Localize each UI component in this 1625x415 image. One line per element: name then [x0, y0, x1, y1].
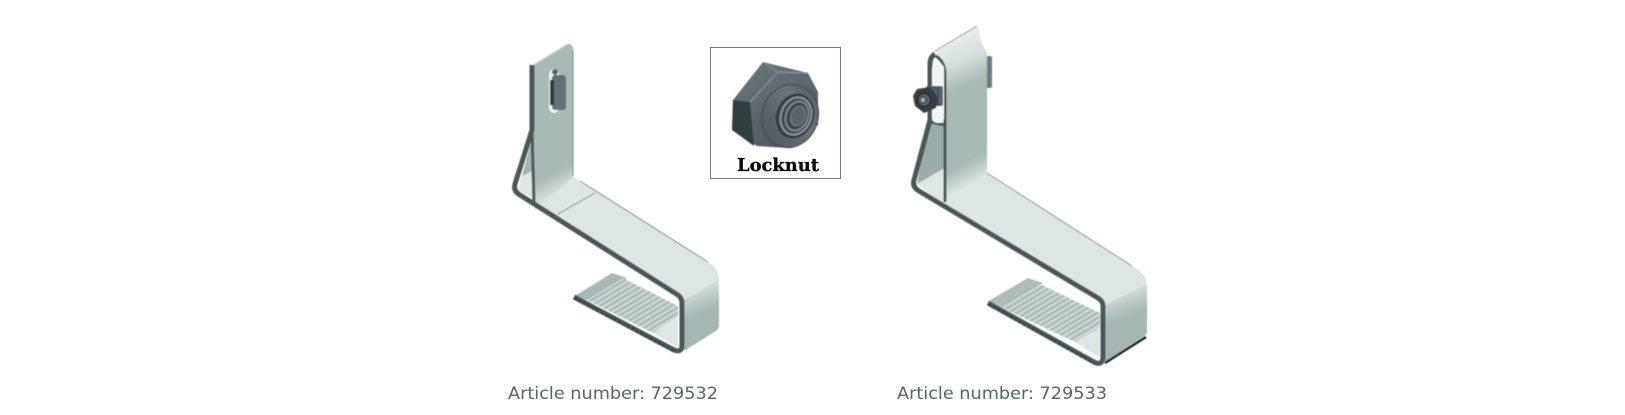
hook tab [987, 278, 1043, 307]
icon: locknut [732, 62, 827, 156]
dark profile edge [914, 54, 1103, 363]
bolt nut [913, 87, 938, 113]
bolt thread [926, 86, 943, 106]
lower inner wall [653, 316, 678, 348]
slot and hidden nut [549, 69, 559, 113]
ridged plate [587, 278, 678, 333]
vertical plate [532, 44, 573, 210]
bracket: article 729533 [913, 26, 1147, 363]
base surface [938, 173, 1147, 305]
end bend [1105, 284, 1147, 362]
ridged plate [1000, 283, 1100, 342]
dark profile edge [515, 65, 682, 351]
inset frame [710, 48, 840, 178]
base surface [535, 176, 719, 300]
gusset window [518, 142, 534, 199]
end bend [684, 279, 719, 351]
locknut inset [710, 48, 840, 178]
gusset panel [917, 122, 945, 184]
bracket: article 729532 [515, 44, 719, 351]
hook tab [573, 273, 627, 300]
slot [932, 63, 944, 123]
rear tab [985, 56, 992, 88]
label: Locknut: Locknut [737, 155, 820, 176]
caption: article 729532: Article number: 729532 [508, 384, 718, 404]
caption: article 729533: Article number: 729533 [897, 384, 1107, 404]
vertical plate [945, 53, 987, 200]
lower inner wall [1075, 327, 1100, 358]
